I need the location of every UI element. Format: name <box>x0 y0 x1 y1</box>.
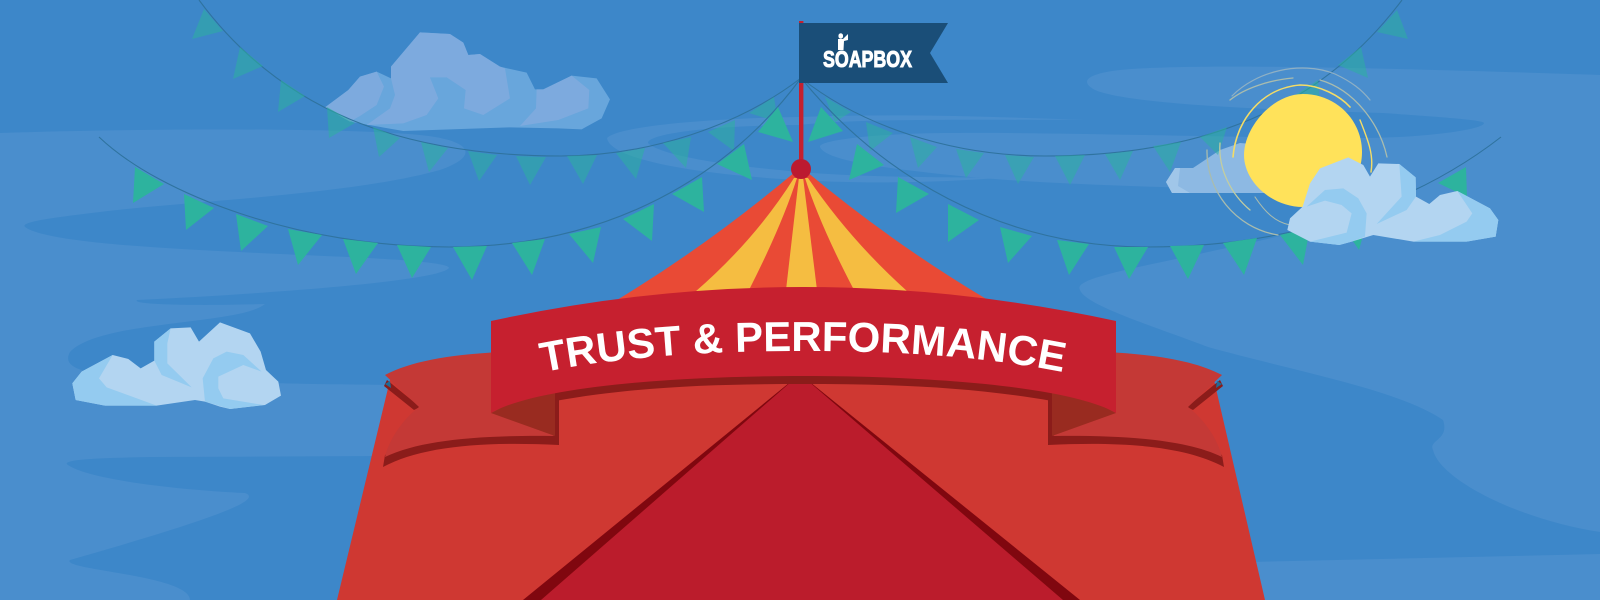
ribbon tail: left <box>383 352 559 467</box>
bunting: front left <box>99 78 801 280</box>
title: TRUST & PERFORMANCE <box>538 322 1066 372</box>
cloud: faded small behind sun <box>1166 143 1280 193</box>
bunting: front right <box>801 78 1501 279</box>
finial ball <box>791 159 811 179</box>
bunting: back left <box>192 0 801 185</box>
ribbon <box>491 287 1116 413</box>
icon: person with megaphone <box>838 33 848 50</box>
flag pole <box>799 21 803 167</box>
sun <box>1244 94 1362 207</box>
cloud: front right <box>1287 157 1498 245</box>
tent door <box>523 374 1080 600</box>
cloud: left <box>72 322 281 409</box>
tent body <box>337 380 1265 600</box>
flag: Soapbox logo <box>799 23 948 83</box>
logo wordmark: SOAPBOX <box>823 46 913 72</box>
tent roof <box>617 172 988 300</box>
ribbon shadow <box>555 370 1052 401</box>
sun rings <box>1207 68 1387 235</box>
cloud: faded top left <box>325 32 610 131</box>
bunting: back right <box>801 0 1408 185</box>
ribbon tail: right <box>1048 352 1224 467</box>
